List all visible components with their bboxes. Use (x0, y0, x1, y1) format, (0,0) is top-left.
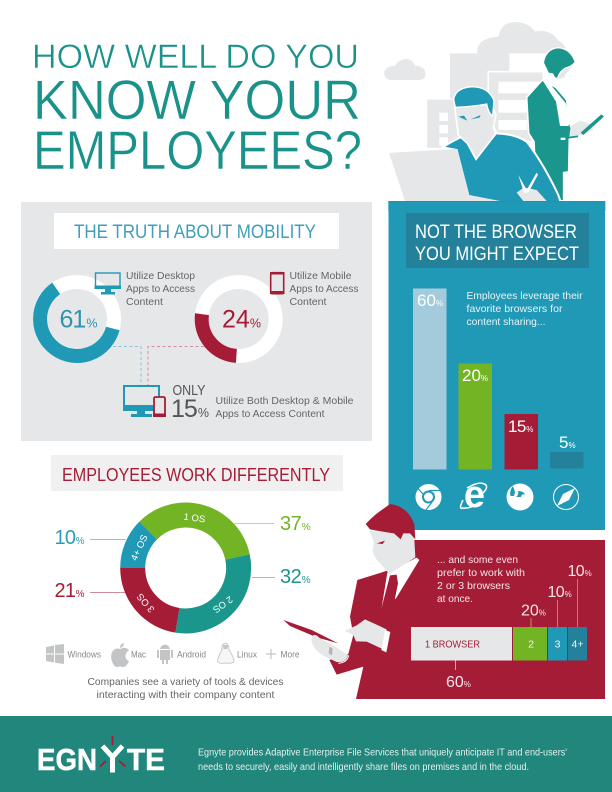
connector lines (113, 346, 204, 385)
text: about egnyte (198, 746, 567, 773)
tablet (283, 620, 338, 643)
logo: egnyte: EGN (37, 742, 97, 777)
figure: woman with tablet (527, 48, 604, 201)
stat: only 15%: ONLY (172, 383, 206, 399)
icon: laptop (389, 149, 500, 201)
text: employees leverage: Employees leverage their (466, 290, 583, 302)
leader lines (90, 524, 275, 592)
stat: only 15%: 15% (171, 395, 209, 423)
icon: windows (46, 644, 64, 664)
icon: plus (266, 649, 276, 659)
icon: desktop and phone (123, 386, 166, 417)
stacked bar: browsers used: 10% (568, 563, 592, 580)
icon: android (157, 644, 173, 664)
text: some even prefer: at once. (437, 593, 473, 605)
heading: employees work differently (51, 455, 343, 491)
stat labels (54, 513, 311, 602)
icon: chrome (416, 484, 442, 510)
title: KNOW YOUR (33, 69, 361, 131)
icon: mobile phone (270, 272, 284, 294)
text: mobile apps: Utilize Mobile (290, 270, 352, 282)
stacked bar: browsers used: 2 (528, 638, 534, 650)
text: both apps: Utilize Both Desktop & Mobile (216, 395, 354, 407)
figure: man at laptop (443, 87, 561, 202)
title: HOW WELL DO YOU (32, 38, 359, 76)
panel: browsers (388, 202, 605, 530)
heading: the truth about mobility (54, 213, 339, 249)
chart: donut 24%: 24% (222, 306, 261, 334)
face (369, 531, 415, 574)
pointing hand (345, 619, 387, 649)
text: employees leverage (466, 290, 583, 328)
chart: OS donut: 1 OS (183, 512, 206, 525)
icon: firefox (506, 484, 534, 510)
stacked bar: browsers used: 10% (548, 584, 572, 601)
text: employees leverage: favorite browsers for (466, 303, 563, 315)
text: some even prefer: prefer to work with (437, 567, 525, 579)
stat labels: 37% (280, 513, 311, 535)
hair (366, 504, 415, 539)
heading: not the browser: NOT THE BROWSER (415, 221, 577, 243)
stacked bar: browsers used: 20% (521, 602, 546, 620)
text: desktop apps (126, 270, 195, 308)
text: some even prefer: ... and some even (437, 554, 518, 566)
icon: large cloud (477, 22, 567, 53)
buildings (427, 53, 543, 150)
illustration: office workers (384, 22, 605, 211)
text: mobile apps (290, 270, 358, 308)
text: mobile apps: Content (290, 296, 327, 308)
bar chart: browsers: 5% (559, 433, 576, 452)
text: desktop apps: Apps to Access (126, 283, 195, 295)
stacked bar: browsers used: 60% (446, 674, 471, 691)
left hand (311, 635, 348, 662)
text: about egnyte: needs to securely, easily and intelligently share files on premises and in the cloud. (198, 761, 529, 773)
chart: donut 24% (202, 282, 276, 356)
desk (388, 201, 605, 211)
text: mobile apps: Apps to Access (290, 283, 358, 295)
bar chart: browsers: 15% (508, 417, 533, 436)
legend: operating systems: More (280, 650, 300, 660)
chart: OS donut: 2 OS (210, 593, 234, 615)
title (32, 38, 362, 181)
icon: apple (111, 643, 129, 667)
icon: small cloud (384, 59, 426, 80)
chart: donut 61%: 61% (60, 306, 97, 334)
stacked bar: browsers used: 4+ (572, 638, 583, 650)
stat labels: 21% (54, 580, 85, 602)
heading: the truth about mobility: THE TRUTH ABOUT MOBILITY (74, 221, 316, 243)
stacked bar: browsers used: 3 (555, 638, 561, 650)
chart: donut 61% (40, 282, 114, 356)
heading: not the browser (406, 213, 589, 268)
tie (382, 575, 398, 607)
suit (329, 558, 418, 699)
figure: man in red suit (283, 504, 419, 699)
shirt (382, 558, 419, 607)
icon: internet explorer: e (464, 474, 485, 516)
bar chart: browsers: 60% (417, 291, 443, 310)
bar chart: browsers (413, 288, 584, 470)
heading: not the browser: YOU MIGHT EXPECT (415, 243, 579, 265)
logo: egnyte (37, 736, 165, 777)
text: desktop apps: Content (126, 296, 163, 308)
text: companies caption: Companies see a variety of tools & devices (88, 676, 284, 688)
legend: operating systems: Mac (131, 650, 146, 660)
bar chart: browsers: 20% (462, 366, 488, 385)
text: some even prefer: 2 or 3 browsers (437, 580, 510, 592)
legend: operating systems (46, 643, 300, 667)
legend: operating systems: Windows (68, 650, 101, 660)
text: companies caption (88, 676, 284, 701)
stacked bar: browsers used: 1 BROWSER (425, 638, 480, 650)
title: EMPLOYEES? (33, 119, 362, 181)
footer (0, 716, 612, 792)
chart: OS donut: 3 OS (135, 591, 157, 614)
text: both apps (216, 395, 354, 420)
icon: safari (554, 484, 578, 510)
chart: OS donut: 4+ OS (129, 533, 150, 563)
text: companies caption: interacting with their company content (96, 689, 275, 701)
icon: desktop monitor (94, 273, 121, 294)
logo: egnyte: TE (127, 742, 165, 777)
stat labels: 32% (280, 566, 311, 588)
text: both apps: Apps to Access Content (216, 408, 325, 420)
stat labels: 10% (54, 527, 85, 549)
stacked bar: browsers used (411, 563, 592, 691)
panel: multiple browsers (283, 504, 605, 699)
text: employees leverage: content sharing... (466, 316, 546, 328)
chart: OS donut (54, 512, 311, 621)
heading: employees work differently: EMPLOYEES WORK DIFFERENTLY (62, 464, 330, 485)
legend: operating systems: Android (177, 650, 206, 660)
text: desktop apps: Utilize Desktop (126, 270, 195, 282)
panel: mobility (21, 202, 372, 441)
text: some even prefer (437, 554, 525, 605)
legend: operating systems: Linux (237, 650, 257, 660)
text: about egnyte: Egnyte provides Adaptive Enterprise File Services that uniquely anticipate IT and end-users' (198, 746, 567, 758)
icon: linux (218, 643, 234, 663)
